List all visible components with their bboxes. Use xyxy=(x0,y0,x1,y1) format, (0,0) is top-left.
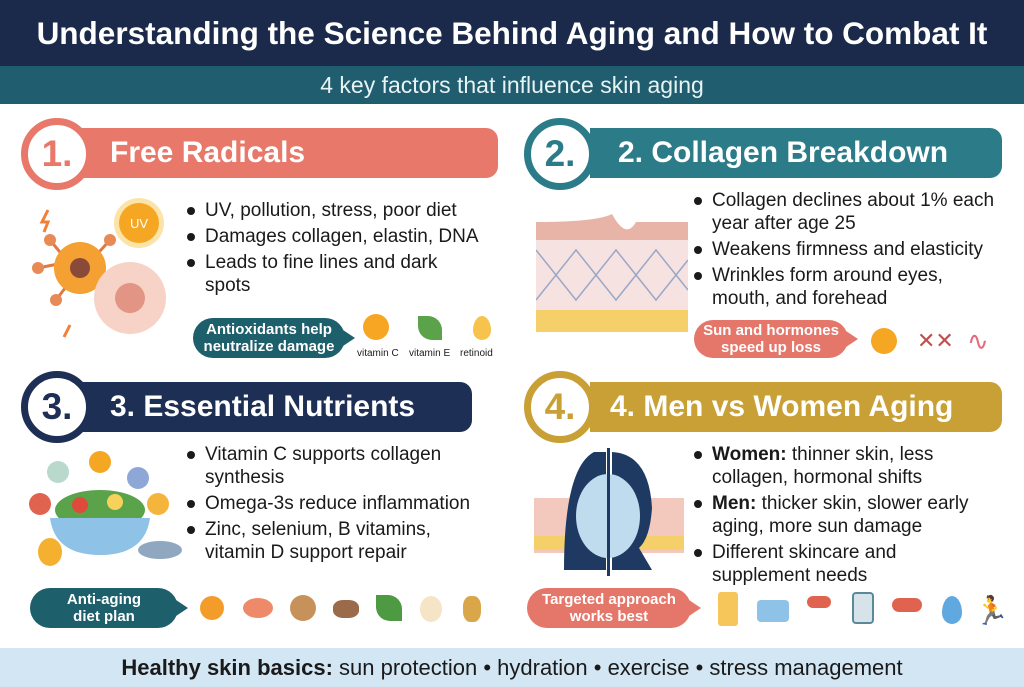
callout: sun and hormones xyxy=(694,320,848,358)
icon: skin cross-section xyxy=(536,214,688,332)
bullets 2: Wrinkles form around eyes, mouth, and forehead xyxy=(712,265,943,309)
bullets 4: Women: thinner skin, less collagen, hormonal shifts xyxy=(712,444,933,488)
bullets 2: Collagen declines about 1% each year after age 25 xyxy=(712,190,994,234)
bullets 1 xyxy=(187,200,479,296)
bullets 4 xyxy=(694,444,969,586)
banner 1 xyxy=(80,128,498,178)
number circle 2: 2. xyxy=(545,133,575,174)
callout: targeted approach xyxy=(527,588,691,628)
callout: targeted approach: works best xyxy=(570,608,648,625)
icon: salad bowl with vitamins xyxy=(29,451,182,566)
number circle 4: 4. xyxy=(545,386,575,427)
panel: collagen xyxy=(524,118,1002,358)
bullets 2 xyxy=(694,190,994,309)
callout: diet plan: diet plan xyxy=(73,608,135,625)
number circle 1 xyxy=(21,118,93,190)
number circle 1: 1. xyxy=(42,133,72,174)
bullets 4: Men: thicker skin, slower early aging, more sun damage xyxy=(712,493,969,537)
title band: Understanding the Science Behind Aging and How to Combat It xyxy=(37,14,987,50)
footer xyxy=(0,648,1024,687)
bullets 3: Zinc, selenium, B vitamins, vitamin D support repair xyxy=(205,519,431,563)
bullets 3: Omega-3s reduce inflammation xyxy=(205,493,470,514)
icons: vitamins: vitamin E xyxy=(409,348,450,359)
bullets 1: UV, pollution, stress, poor diet xyxy=(205,200,457,221)
title band xyxy=(0,0,1024,66)
callout: sun and hormones: speed up loss xyxy=(721,339,821,356)
panel: free radicals xyxy=(21,118,498,359)
callout: sun and hormones: Sun and hormones xyxy=(703,322,839,339)
number circle 4 xyxy=(524,371,596,443)
bullets 2: Weakens firmness and elasticity xyxy=(712,239,983,260)
callout: diet plan xyxy=(30,588,178,628)
bullets 1: Damages collagen, elastin, DNA xyxy=(205,226,479,247)
footer: sun protection • hydration • exercise • stress management xyxy=(339,654,903,680)
icons: skincare products: 🏃 xyxy=(974,595,1009,626)
subtitle band xyxy=(0,66,1024,104)
banner 3 xyxy=(80,382,472,432)
panel: nutrients xyxy=(21,371,481,628)
number circle 3: 3. xyxy=(42,386,72,427)
number circle 2 xyxy=(524,118,596,190)
bullets 1: Leads to fine lines and dark spots xyxy=(205,252,437,296)
bullets 3: Vitamin C supports collagen synthesis xyxy=(205,444,441,488)
icons: sun, hormones, wave xyxy=(871,326,989,356)
icons: vitamins: retinoid xyxy=(460,348,493,359)
subtitle band: 4 key factors that influence skin aging xyxy=(320,72,704,98)
callout: diet plan: Anti-aging xyxy=(67,591,141,608)
icon: UV sun xyxy=(119,203,159,243)
callout: targeted approach: Targeted approach xyxy=(542,591,676,608)
bullets 4: Different skincare and supplement needs xyxy=(712,542,896,586)
icon: split face xyxy=(534,448,684,576)
icons: skincare products xyxy=(718,592,1009,626)
icon: free radical cell xyxy=(32,209,166,338)
banner 3: 3. Essential Nutrients xyxy=(110,390,415,423)
icon: UV sun: UV xyxy=(130,216,148,230)
banner 1: Free Radicals xyxy=(110,136,305,169)
callout: antioxidants: neutralize damage xyxy=(204,338,334,355)
icons: foods xyxy=(200,595,481,622)
bullets 3 xyxy=(187,444,470,563)
footer: Healthy skin basics: xyxy=(121,654,333,680)
icons: sun, hormones, wave: ∿ xyxy=(967,326,989,356)
callout: antioxidants xyxy=(193,318,345,358)
banner 4: 4. Men vs Women Aging xyxy=(610,390,953,423)
banner 2 xyxy=(590,128,1002,178)
number circle 3 xyxy=(21,371,93,443)
icons: vitamins xyxy=(357,314,493,359)
banner 4 xyxy=(590,382,1002,432)
callout: antioxidants: Antioxidants help xyxy=(206,321,332,338)
icons: sun, hormones, wave: ✕✕ xyxy=(917,328,954,353)
panel: men vs women xyxy=(524,371,1009,628)
banner 2: 2. Collagen Breakdown xyxy=(618,136,948,169)
icons: vitamins: vitamin C xyxy=(357,348,399,359)
